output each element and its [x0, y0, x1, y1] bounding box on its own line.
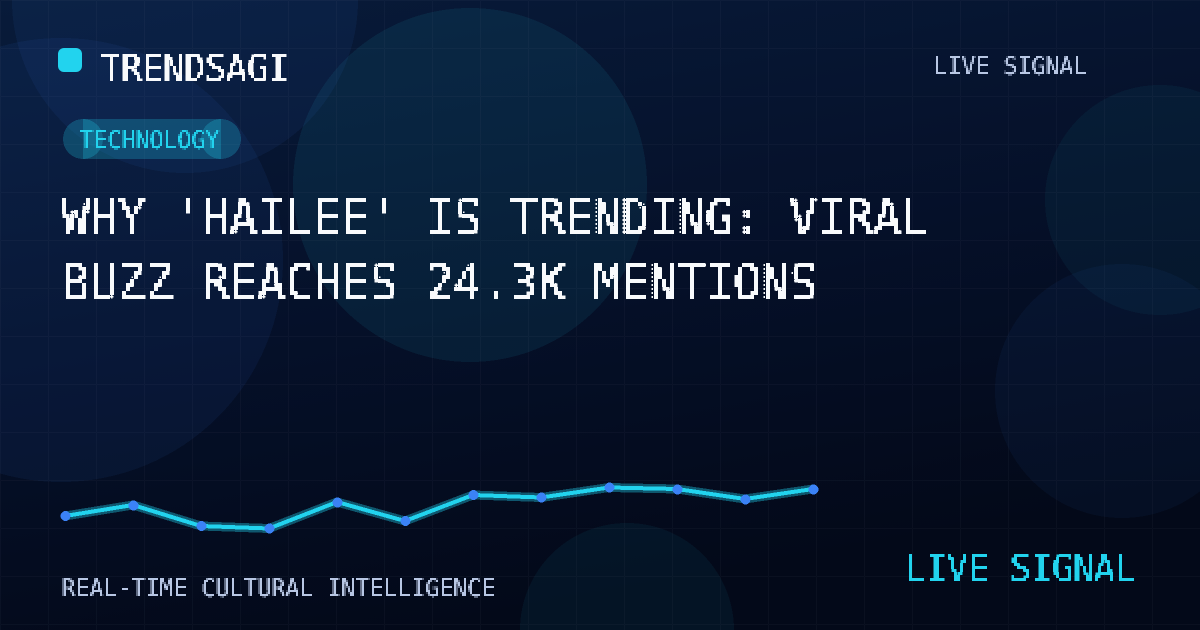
category pill: TECHNOLOGY	[79, 125, 219, 154]
category pill	[63, 119, 241, 159]
headline: WHY 'HAILEE' IS TRENDING: VIRAL	[61, 189, 929, 246]
icon: logo square	[58, 48, 82, 72]
line chart: signal trend	[60, 482, 818, 534]
brand name: TRENDSAGI	[100, 48, 289, 90]
footer tagline: REAL-TIME CULTURAL INTELLIGENCE	[61, 573, 495, 602]
headline: BUZZ REACHES 24.3K MENTIONS	[61, 254, 817, 311]
bottom right live signal label: LIVE SIGNAL	[905, 548, 1136, 590]
top right label: LIVE SIGNAL	[933, 51, 1087, 80]
headline	[61, 189, 929, 311]
